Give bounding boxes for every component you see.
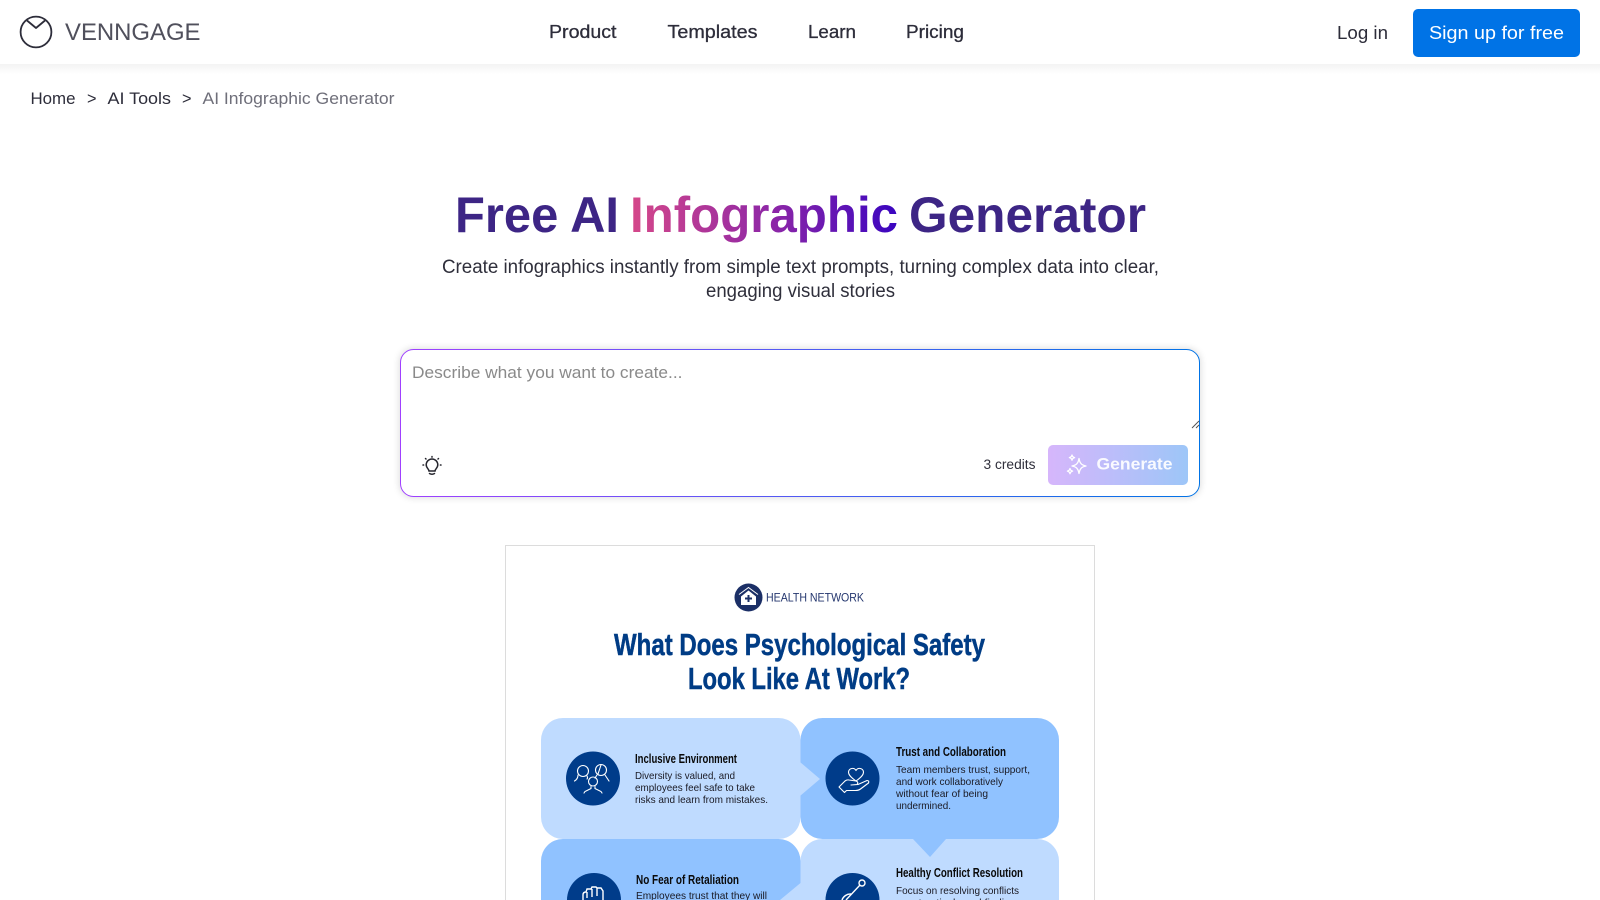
panel: inclusive environment: Diversity is valued, and bbox=[635, 770, 735, 782]
icon: Venngage logo bbox=[21, 17, 51, 47]
resize handle bbox=[1192, 421, 1199, 428]
subtitle: engaging visual stories bbox=[706, 281, 895, 302]
arrow: right to trust and collaboration bbox=[800, 762, 820, 796]
panel: inclusive environment: Inclusive Environment bbox=[635, 752, 738, 766]
header bar bbox=[0, 0, 1600, 74]
breadcrumb: AI Infographic Generator bbox=[202, 89, 395, 108]
panel: trust and collaboration: Trust and Collaboration bbox=[896, 745, 1006, 759]
navigation links: Learn bbox=[808, 22, 856, 42]
icon: three people bbox=[574, 764, 609, 793]
panel: trust and collaboration: undermined. bbox=[896, 800, 951, 812]
panel: no fear of retaliation: No Fear of Retaliation bbox=[636, 873, 739, 887]
panel: trust and collaboration: Team members trust, support, bbox=[896, 764, 1030, 776]
icon: sparkles bbox=[1067, 455, 1086, 474]
navigation links: Product bbox=[549, 22, 616, 42]
arrow: down to conflict resolution bbox=[913, 839, 946, 857]
log in link: Log in bbox=[1337, 22, 1388, 43]
navigation links bbox=[549, 22, 964, 42]
breadcrumb: Home bbox=[30, 89, 76, 108]
infographic preview bbox=[506, 546, 1094, 900]
subtitle: Create infographics instantly from simple text prompts, turning complex data into clear, bbox=[442, 257, 1159, 278]
icon: hand holding heart bbox=[839, 768, 869, 792]
navigation links: Pricing bbox=[906, 22, 964, 42]
infographic heading: Look Like At Work? bbox=[688, 661, 910, 696]
panel: inclusive environment: employees feel safe to take bbox=[635, 782, 755, 794]
panel: inclusive environment: risks and learn from mistakes. bbox=[635, 794, 768, 806]
sign up button bbox=[1413, 9, 1580, 57]
icon: health network logo bbox=[734, 584, 762, 612]
breadcrumb: > bbox=[87, 89, 97, 108]
panel: healthy conflict resolution bbox=[780, 839, 1059, 900]
panel: trust and collaboration: without fear of being bbox=[895, 788, 988, 800]
icon: handshake key bbox=[842, 885, 860, 900]
sign up button: Sign up for free bbox=[1429, 22, 1564, 43]
prompt box bbox=[400, 349, 1200, 497]
panel: healthy conflict resolution: Healthy Conflict Resolution bbox=[896, 866, 1023, 880]
infographic heading bbox=[614, 632, 986, 690]
panel: trust and collaboration: and work collaboratively bbox=[896, 776, 1004, 788]
generate button bbox=[1048, 445, 1188, 485]
title bbox=[455, 187, 1146, 243]
title: Infographic bbox=[630, 187, 898, 243]
wordmark: VENNGAGE bbox=[65, 19, 200, 46]
panel: inclusive environment bbox=[541, 718, 820, 839]
credits counter: 3 credits bbox=[984, 457, 1036, 472]
placeholder text: Describe what you want to create... bbox=[412, 363, 682, 382]
title: Generator bbox=[909, 187, 1146, 243]
breadcrumb bbox=[30, 89, 395, 108]
navigation links: Templates bbox=[668, 22, 758, 42]
title: Free AI bbox=[455, 187, 619, 243]
breadcrumb: AI Tools bbox=[108, 89, 171, 108]
icon: light bulb bbox=[423, 456, 441, 474]
health network wordmark: HEALTH NETWORK bbox=[766, 590, 864, 604]
infographic heading: What Does Psychological Safety bbox=[614, 627, 986, 662]
subtitle bbox=[442, 257, 1159, 302]
panel: healthy conflict resolution: Focus on resolving conflicts bbox=[896, 885, 1019, 897]
panel: trust and collaboration bbox=[800, 718, 1059, 857]
breadcrumb: > bbox=[182, 89, 192, 108]
icon: fist bbox=[583, 887, 603, 900]
panel: no fear of retaliation bbox=[541, 839, 800, 900]
generate button: Generate bbox=[1096, 454, 1172, 474]
